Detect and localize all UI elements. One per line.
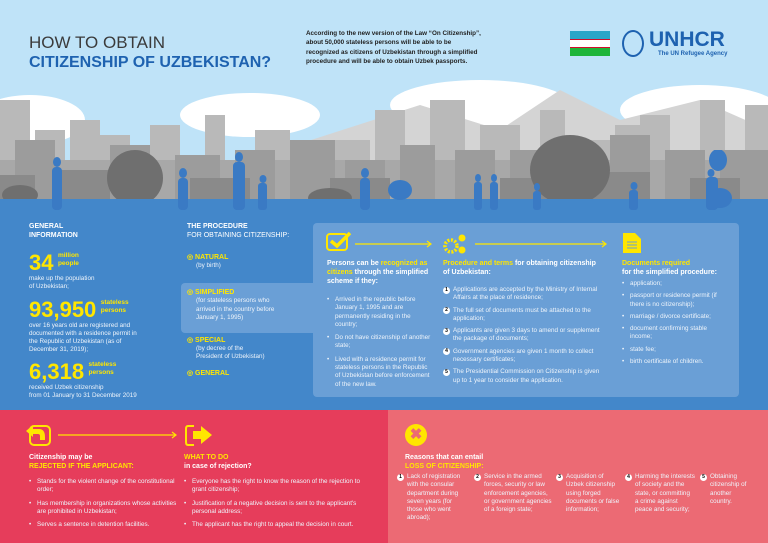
heading: Reasons that can entail [405,454,483,461]
general information: received Uzbek citizenship [29,384,104,391]
arrow [58,432,177,438]
bottom right panel: loss of citizenship [388,410,768,543]
column: procedure and terms: 5 [445,369,448,375]
reasons: 2 [476,474,479,480]
procedure types: (for stateless persons who arrived in the country before January 1, 1995) [196,297,274,321]
stat 93950: persons [101,307,126,314]
reasons: Acquisition of Uzbek citizenship using forged documents or false information; [566,473,619,513]
procedure types: ◎ SIMPLIFIED [187,289,234,296]
column: procedure and terms: 2 [445,307,448,313]
stat 34: people [58,260,79,267]
stat 34 [29,250,79,275]
reasons [397,473,746,521]
procedure types: (by decree of the [196,345,243,352]
stat 6318: 6,318 [29,359,84,384]
column: procedure and terms: 4 [445,348,448,354]
stat 6318 [29,359,116,384]
reasons: Service in the armed forces, security or law enforcement agencies, or government agencies of a foreign state; [484,473,552,513]
trees [2,135,610,208]
column: documents required: marriage / divorce certificate; [630,313,711,320]
column: procedure and terms: Applicants are given 3 days to amend or supplement the package of documents; [453,327,600,342]
column: procedure and terms: The Presidential Commission on Citizenship is given up to 1 year to consider the application. [453,368,599,384]
icon: x circle: ✖ [410,426,422,443]
procedure types [187,223,289,377]
column: recognized as citizens: Arrived in the republic before January 1, 1995 and are permanently residing in the country; [335,296,416,328]
rejected if: Stands for the violent change of the constitutional order; [37,478,175,493]
reasons: Harming the interests of society and the state, or committing a crime against peace and security; [635,473,695,513]
procedure types: FOR OBTAINING CITIZENSHIP: [187,232,289,239]
general information: INFORMATION [29,232,78,239]
intro text: recognized as citizens of Uzbekistan through a simplified [306,49,477,56]
intro text: about 50,000 stateless persons will be able to be [306,39,451,46]
reasons: 4 [627,474,630,480]
stat 93950 [29,297,129,322]
rejected if [29,454,176,528]
what to do: Justification of a negative decision is sent to the applicant's personal address; [192,500,356,515]
procedure types: (by birth) [196,262,221,269]
column: recognized as citizens [327,260,430,388]
UNHCR logo [622,28,728,57]
heading: LOSS OF CITIZENSHIP: [405,463,484,470]
column: documents required: passport or residence permit (if there is no citizenship); [630,292,717,308]
stat 93950: stateless [101,299,129,306]
icon: back arrow [26,425,51,446]
column: procedure and terms: 3 [445,328,448,334]
bottom left panel [0,410,388,543]
procedure types: ◎ GENERAL [187,370,229,377]
rejected if: Serves a sentence in detention facilities. [37,521,149,528]
procedure tab [181,283,315,333]
heading [405,454,484,470]
procedure types: President of Uzbekistan) [196,353,265,360]
intro text: According to the new version of the Law “On Citizenship”, [306,30,481,37]
column: documents required: for the simplified procedure: [622,269,717,276]
procedure types: ◎ SPECIAL [187,337,225,344]
what to do: WHAT TO DO [184,454,228,461]
what to do: in case of rejection? [184,463,252,470]
column: recognized as citizens: Do not have citizenship of another state; [335,334,430,349]
column: procedure and terms: The full set of documents must be attached to the application; [453,307,591,322]
UNHCR logo: The UN Refugee Agency [658,51,727,57]
rejected if: REJECTED IF THE APPLICANT: [29,463,134,470]
column: procedure and terms: 1 [445,286,448,292]
general information: GENERAL [29,223,63,230]
procedure types: ◎ NATURAL [187,254,228,261]
flag of Uzbekistan [570,31,610,56]
general information: from 01 January to 31 December 2019 [29,392,137,399]
reasons: 3 [558,474,561,480]
general information: over 16 years old are registered and documented with a residence permit in the Republic of Uzbekistan (as of December 31, 2019); [29,322,137,353]
what to do: Everyone has the right to know the reason of the rejection to grant citizenship; [192,478,360,493]
column: documents required: Documents required [622,260,690,267]
icon: gears [443,234,466,254]
column: documents required [622,260,717,365]
stat 6318: persons [89,369,114,376]
arrow 1 [355,240,432,248]
column: documents required: document confirming stable income; [630,325,707,340]
column: documents required: birth certificate of children. [630,358,704,365]
procedure types: THE PROCEDURE [187,223,248,230]
column: documents required: state fee; [630,346,656,353]
blue ground section [0,199,768,410]
reasons: Obtaining citizenship of another country. [710,473,746,505]
reasons: Lack of registration with the consular department during seven years (for those who went abroad); [407,473,460,521]
rejected if: Citizenship may be [29,454,92,461]
UNHCR logo: UNHCR [649,28,725,51]
intro text [306,30,481,65]
procedure panel box [313,223,739,397]
icon: checkbox [326,232,352,251]
column: recognized as citizens: Lived with a residence permit for stateless persons in the Republic of Uzbekistan before enforcement of the new law. [335,356,430,388]
stat 6318: stateless [89,361,116,368]
column: recognized as citizens: Persons can be recognized as citizens through the simplified scheme if they: [327,260,428,285]
reasons: 5 [702,474,705,480]
icon: x circle [405,424,427,446]
stat 34: million [58,252,79,259]
title [29,33,271,71]
icon: document [623,233,641,253]
skyline background [0,80,768,199]
people silhouettes [52,150,732,210]
what to do [184,454,360,528]
column: procedure and terms: Procedure and terms for obtaining citizenship of Uzbekistan: [443,260,596,276]
column: procedure and terms: Applications are accepted by the Ministry of Internal Affairs at the place of residence; [453,286,597,301]
rejected if: Has membership in organizations whose activities are prohibited in Uzbekistan; [37,500,176,515]
stat 93950: 93,950 [29,297,96,322]
general information [29,223,137,399]
intro text: procedure and will be able to obtain Uzbek passports. [306,58,467,65]
what to do: The applicant has the right to appeal the decision in court. [192,521,353,528]
icon: forward arrow [185,425,212,446]
column: procedure and terms: Government agencies are given 1 month to collect necessary certificates; [453,348,593,363]
reasons: 1 [399,474,402,480]
arrow 2 [475,240,607,248]
general information: make up the population [29,275,94,282]
column: procedure and terms [443,260,600,384]
title: HOW TO OBTAIN [29,33,165,52]
general information: of Uzbekistan; [29,283,69,290]
column: documents required: application; [630,280,662,287]
stat 34: 34 [29,250,53,275]
title: CITIZENSHIP OF UZBEKISTAN? [29,54,271,71]
